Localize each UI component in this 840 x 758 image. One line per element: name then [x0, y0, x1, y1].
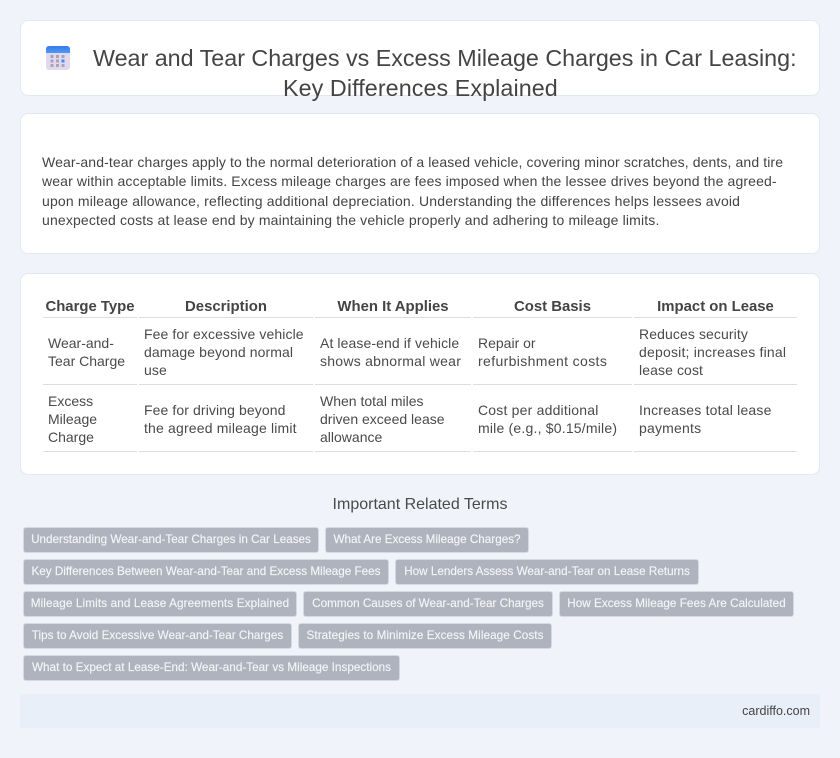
intro paragraph: upon mileage allowance, reflecting additional depreciation. Understanding the differences helps lessees avoid — [42, 193, 740, 209]
tag: Mileage Limits and Lease Agreements Explained — [31, 597, 289, 610]
tag: What to Expect at Lease-End: Wear-and-Tear vs Mileage Inspections — [32, 661, 391, 674]
cell: wear-and-tear charge type: Tear Charge — [48, 353, 125, 369]
tag: Strategies to Minimize Excess Mileage Costs — [306, 629, 544, 642]
cell: wear-and-tear cost basis — [478, 335, 607, 369]
cell: wear-and-tear impact: Reduces security — [639, 326, 748, 342]
header: Description: Description — [185, 299, 267, 315]
title: Key Differences Explained — [283, 75, 558, 101]
cell: wear-and-tear impact: deposit; increases final — [639, 344, 786, 360]
icon: calendar — [46, 46, 70, 70]
cell: excess mileage impact: payments — [639, 420, 701, 436]
header: Charge Type: Charge Type — [45, 299, 135, 315]
cell: excess mileage timing — [320, 393, 445, 445]
intro paragraph: wear within acceptable limits. Excess mileage charges are fees imposed when the lessee drives beyond the agreed- — [42, 173, 777, 189]
tag — [23, 559, 389, 585]
panel: important related terms — [23, 496, 794, 681]
comparison table — [43, 299, 797, 452]
cell: excess mileage description: the agreed mileage limit — [144, 420, 297, 436]
footer: site name: cardiffo.com — [742, 704, 810, 718]
cell: excess mileage charge type: Excess — [48, 393, 93, 409]
tag: Common Causes of Wear-and-Tear Charges — [312, 597, 544, 610]
cell: excess mileage charge type: Charge — [48, 429, 94, 445]
tag: Key Differences Between Wear-and-Tear and Excess Mileage Fees — [31, 565, 381, 578]
panel: comparison table card — [20, 273, 820, 475]
intro paragraph: unexpected costs at lease end by maintaining the vehicle properly and adhering to mileage limits. — [42, 212, 660, 228]
cell: excess mileage charge type — [48, 393, 97, 445]
cell: wear-and-tear cost basis: refurbishment costs — [478, 353, 607, 369]
cell: wear-and-tear description: damage beyond normal — [144, 344, 293, 360]
panel: title card — [20, 20, 820, 96]
cell: excess mileage impact — [639, 402, 772, 436]
tag: How Excess Mileage Fees Are Calculated — [567, 597, 786, 610]
tag: How Lenders Assess Wear-and-Tear on Lease Returns — [404, 565, 690, 578]
cell: wear-and-tear timing: shows abnormal wear — [320, 353, 461, 369]
heading: related terms: Important Related Terms — [333, 496, 507, 513]
header: Impact on Lease: Impact on Lease — [657, 299, 774, 315]
tag — [395, 559, 699, 585]
cell: wear-and-tear description — [144, 326, 304, 378]
cell: wear-and-tear charge type: Wear-and- — [48, 335, 114, 351]
title — [93, 45, 797, 101]
tag — [23, 655, 400, 681]
footer bar — [20, 694, 820, 728]
cell: wear-and-tear charge type — [48, 335, 125, 369]
cell: excess mileage description: Fee for driving beyond — [144, 402, 286, 418]
tag — [298, 623, 552, 649]
tag — [23, 591, 297, 617]
cell: excess mileage timing: When total miles — [320, 393, 423, 409]
cell: wear-and-tear description: use — [144, 362, 167, 378]
cell: excess mileage timing: allowance — [320, 429, 382, 445]
panel: intro text card — [20, 113, 820, 254]
tag — [325, 527, 529, 553]
tag: What Are Excess Mileage Charges? — [333, 533, 521, 546]
tag — [23, 623, 292, 649]
cell: wear-and-tear timing — [320, 335, 461, 369]
tag — [303, 591, 553, 617]
cell: excess mileage cost basis — [478, 402, 617, 436]
cell: excess mileage cost basis: Cost per additional — [478, 402, 599, 418]
cell: excess mileage charge type: Mileage — [48, 411, 97, 427]
intro paragraph — [42, 154, 783, 228]
cell: excess mileage impact: Increases total lease — [639, 402, 772, 418]
header: When It Applies: When It Applies — [337, 299, 449, 315]
cell: excess mileage cost basis: mile (e.g., $0.15/mile) — [478, 420, 617, 436]
cell: wear-and-tear description: Fee for excessive vehicle — [144, 326, 304, 342]
header: Cost Basis: Cost Basis — [514, 299, 591, 315]
cell: wear-and-tear cost basis: Repair or — [478, 335, 536, 351]
tag — [23, 527, 319, 553]
intro paragraph: Wear-and-tear charges apply to the normal deterioration of a leased vehicle, covering minor scratches, dents, and tire — [42, 154, 783, 170]
cell: wear-and-tear timing: At lease-end if vehicle — [320, 335, 459, 351]
cell: wear-and-tear impact — [639, 326, 786, 378]
tag — [559, 591, 794, 617]
cell: excess mileage timing: driven exceed lease — [320, 411, 445, 427]
cell: wear-and-tear impact: lease cost — [639, 362, 703, 378]
cell: excess mileage description — [144, 402, 297, 436]
tag: Understanding Wear-and-Tear Charges in Car Leases — [31, 533, 311, 546]
title: Wear and Tear Charges vs Excess Mileage Charges in Car Leasing: — [93, 45, 797, 71]
tag: Tips to Avoid Excessive Wear-and-Tear Charges — [32, 629, 283, 642]
